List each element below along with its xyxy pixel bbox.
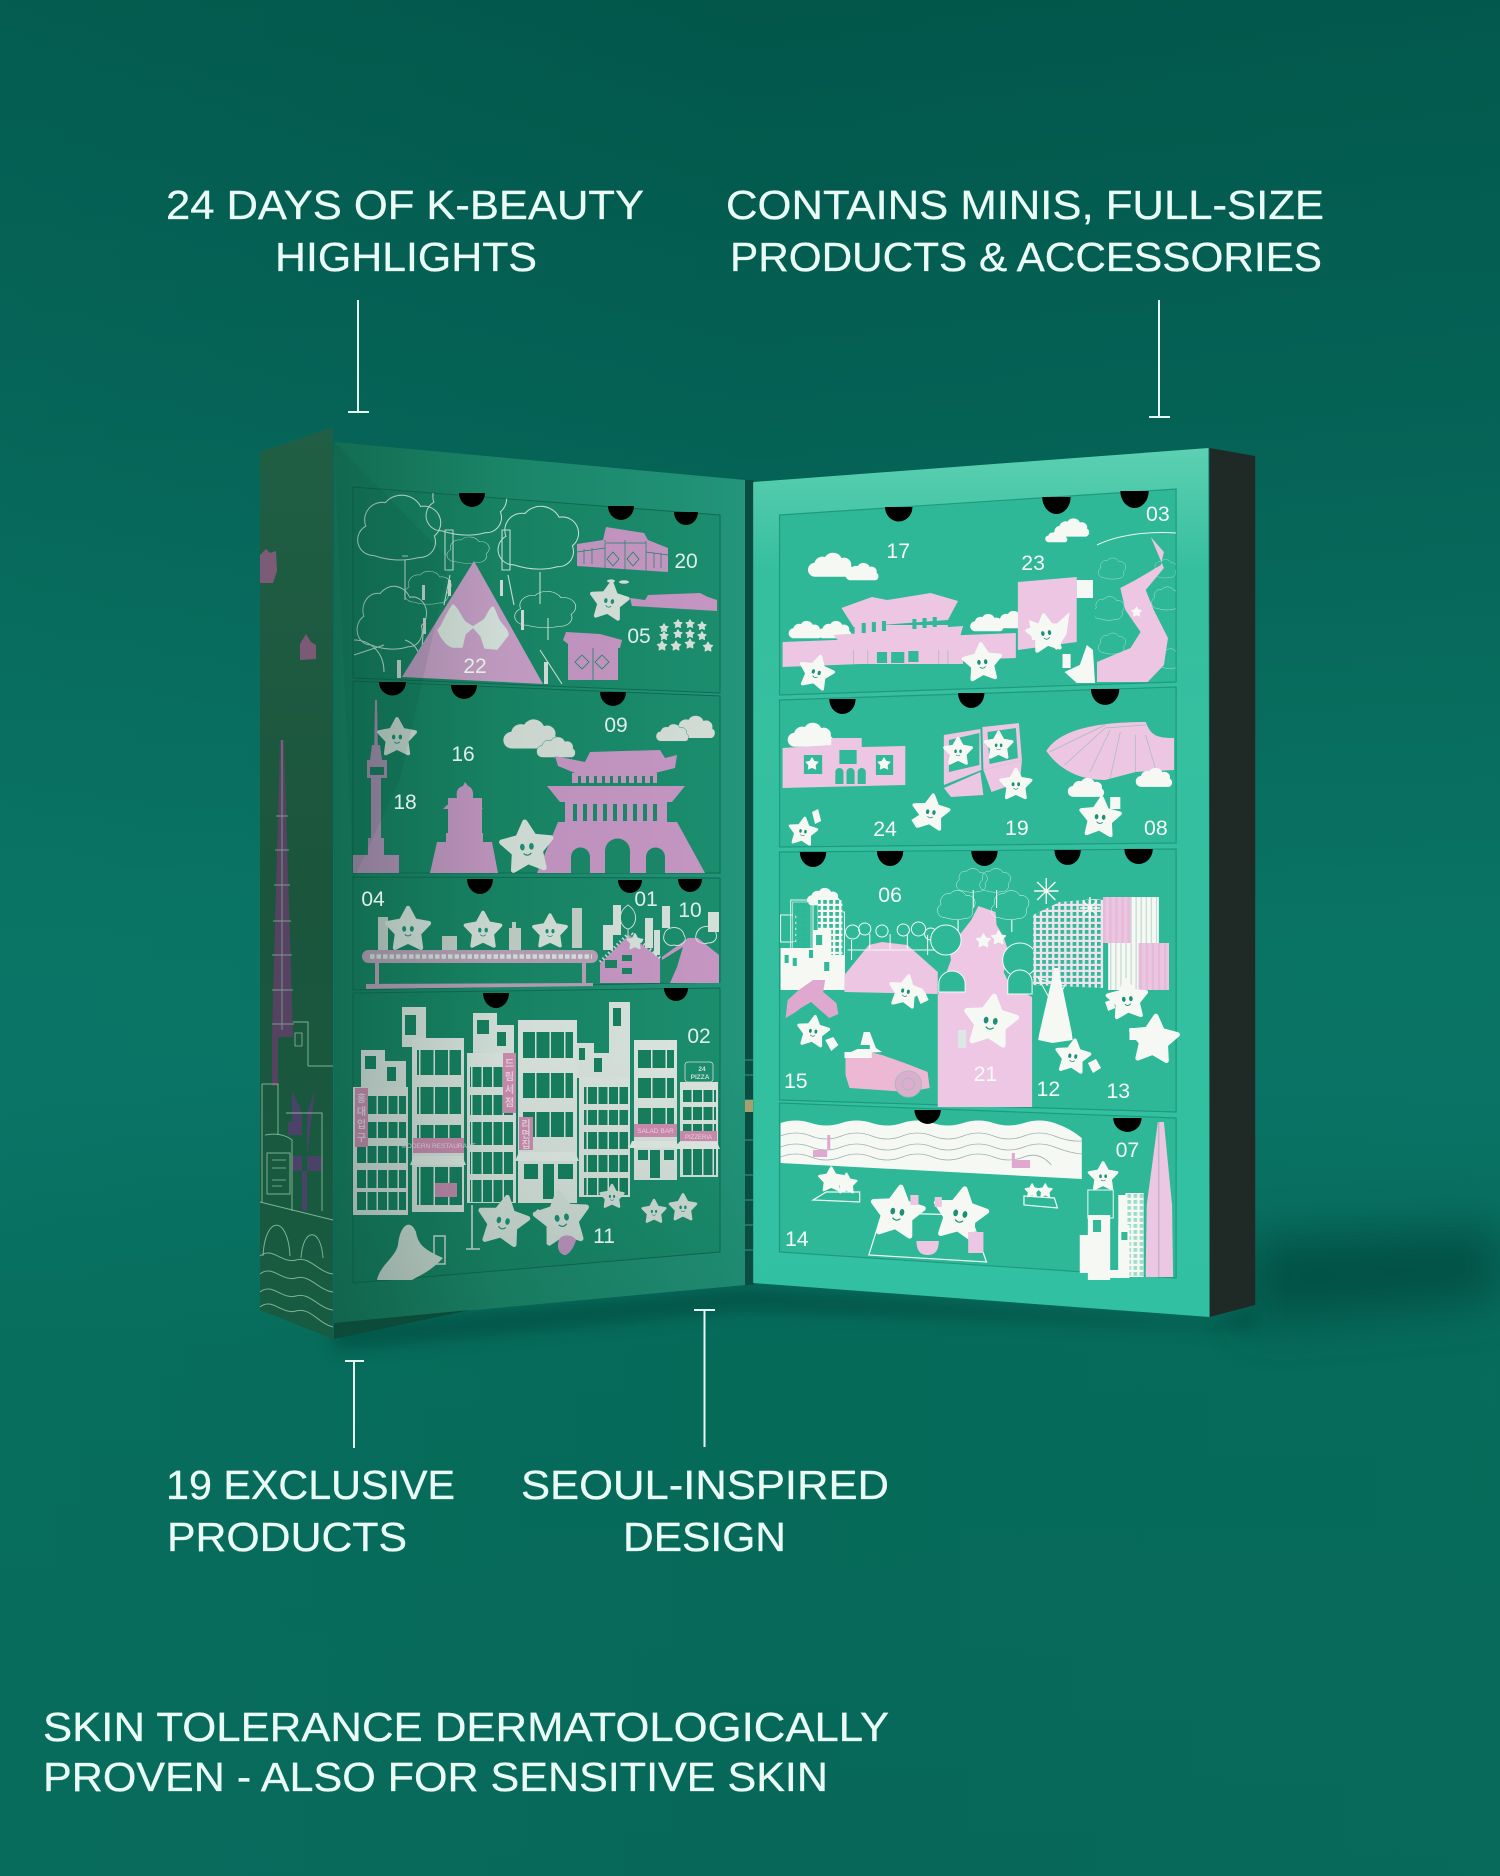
clouds (789, 518, 1089, 638)
heading: 24 days of k-beauty: HIGHLIGHTS (275, 234, 537, 280)
shop signs: SALAD BAR (637, 1128, 674, 1135)
heading: 19 exclusive products (166, 1462, 455, 1560)
heading: skin tolerance (43, 1704, 889, 1800)
right day numbers: 21 (974, 1063, 997, 1086)
stars (379, 719, 553, 871)
shop signs: 집 (521, 1139, 531, 1151)
stars and props (377, 1183, 696, 1280)
stars (788, 769, 1121, 845)
central spine (745, 480, 754, 1285)
heading: seoul-inspired design: DESIGN (623, 1514, 786, 1560)
heading: 24 days of k-beauty: 24 DAYS OF K-BEAUTY (166, 182, 644, 228)
left day numbers: 20 (674, 550, 698, 573)
pink board 23 (1018, 577, 1093, 650)
drawer row 4 illustration (353, 1002, 720, 1280)
right half of the box (753, 448, 1255, 1317)
right day numbers (784, 503, 1170, 1251)
heading: 24 days of k-beauty (166, 182, 644, 280)
drawer row 2 illustration (353, 700, 715, 873)
right day numbers: 14 (785, 1228, 809, 1251)
left day numbers: 22 (463, 655, 487, 678)
front buildings (353, 1020, 718, 1215)
left day numbers: 16 (451, 743, 475, 766)
flat palace (630, 593, 717, 611)
left day numbers: 04 (361, 888, 385, 911)
right day numbers: 17 (886, 540, 910, 563)
right row 3 illustration (781, 868, 1179, 1107)
trees outline (354, 472, 579, 684)
statue (430, 782, 498, 873)
right finger notches (800, 491, 1153, 1132)
namdaemun gate (537, 750, 705, 873)
striped blocks (1103, 897, 1169, 990)
river 03 (1097, 537, 1168, 682)
heading: 19 exclusive products: PRODUCTS (167, 1514, 407, 1560)
shop signs: 리 (521, 1119, 531, 1131)
left day numbers (361, 550, 711, 1248)
right drawers (780, 489, 1176, 1278)
left day numbers: 11 (593, 1225, 615, 1248)
left cover (334, 442, 745, 1323)
shop signs: PIZZERIA (685, 1135, 712, 1141)
shop signs: 림 (505, 1071, 514, 1083)
convertible car (844, 1032, 930, 1097)
floor shadow (334, 1228, 1500, 1350)
shop signs: 구 (357, 1132, 366, 1144)
left day numbers: 01 (634, 888, 658, 911)
trees 03 outline (1093, 532, 1183, 669)
food carts (944, 723, 1022, 797)
left drawers (353, 487, 720, 1283)
outline trees (937, 868, 1029, 932)
advent calendar box (260, 427, 1255, 1339)
scene 10 (662, 906, 719, 983)
shop signs: PIZZA (691, 1074, 710, 1081)
shop signs: 드 (505, 1058, 514, 1070)
shop signs: 입 (357, 1118, 366, 1131)
left day numbers: 09 (604, 714, 628, 737)
shop signs: 24 (698, 1066, 706, 1073)
awnings (410, 1141, 720, 1165)
stars (796, 931, 1179, 1073)
heading: contains minis: CONTAINS MINIS, FULL-SIZE (726, 182, 1324, 228)
star characters (589, 579, 713, 651)
picnic mats (813, 1192, 1057, 1262)
right row 1 illustration (783, 518, 1183, 690)
heading: contains minis (726, 182, 1324, 280)
heading: seoul-inspired design (521, 1462, 889, 1560)
heading: seoul-inspired design: SEOUL-INSPIRED (521, 1462, 889, 1508)
left day numbers: 10 (678, 899, 702, 922)
shop signs: 대 (357, 1105, 366, 1118)
shop signs: MODERN RESTAURANT (401, 1143, 476, 1150)
heading: skin tolerance: SKIN TOLERANCE DERMATOLOGICALLY (43, 1704, 889, 1750)
shop signs: 홍 (357, 1092, 366, 1105)
stars (797, 607, 1141, 690)
museum (783, 723, 905, 788)
left day numbers: 02 (687, 1025, 711, 1048)
gate building (577, 527, 668, 572)
shop signs: 면 (521, 1129, 531, 1141)
shop signs (355, 1053, 717, 1153)
shop signs: 점 (505, 1097, 514, 1109)
right cover (753, 448, 1210, 1317)
products (378, 908, 582, 950)
right day numbers: 08 (1144, 817, 1168, 840)
windows (357, 1032, 716, 1210)
palace (783, 593, 1016, 667)
drawer row 1 illustration (354, 472, 717, 684)
hotel (1033, 899, 1103, 1000)
pink hill and trees (844, 922, 939, 994)
pink mountain (402, 561, 543, 684)
right day numbers: 03 (1146, 503, 1170, 526)
callout line: bottom centre (694, 1310, 715, 1447)
callout line: top right (1149, 300, 1170, 417)
right day numbers: 19 (1005, 817, 1029, 840)
small gate (563, 632, 622, 680)
skyline 07 (1080, 1122, 1173, 1280)
white wing stars (438, 605, 508, 649)
stars and props (819, 1168, 1052, 1240)
pink tower (938, 906, 1032, 1107)
right day numbers: 06 (878, 884, 902, 907)
rear buildings (361, 1002, 630, 1087)
right row 4 illustration (781, 1120, 1173, 1280)
left cover base shadow (334, 1310, 470, 1339)
heading: skin tolerance: PROVEN - ALSO FOR SENSITIVE SKIN (43, 1754, 828, 1800)
left finger notches (379, 493, 702, 1008)
heading: contains minis: PRODUCTS & ACCESSORIES (730, 234, 1322, 280)
drawer row 3 illustration (362, 905, 719, 989)
river band (781, 1120, 1082, 1179)
sparkles (1034, 878, 1100, 919)
shop signs: 서 (505, 1083, 514, 1096)
city skyline 15 (781, 888, 844, 990)
arm (786, 980, 838, 1018)
right day numbers: 23 (1021, 552, 1045, 575)
callout line: bottom left (345, 1361, 364, 1448)
left cover shading (334, 442, 745, 1323)
oyster dome (1046, 722, 1174, 797)
right day numbers: 15 (784, 1070, 808, 1093)
scene 01 (600, 905, 660, 983)
conveyor belt (362, 950, 598, 989)
right dark side (1210, 448, 1255, 1317)
stars (387, 908, 566, 948)
heading: 19 exclusive products: 19 EXCLUSIVE (166, 1462, 455, 1508)
right day numbers: 13 (1106, 1080, 1130, 1103)
callout line: top left (348, 300, 369, 412)
right day numbers: 24 (873, 818, 897, 841)
right day numbers: 07 (1116, 1139, 1139, 1162)
cone (1038, 968, 1073, 1043)
left day numbers: 18 (393, 791, 417, 814)
right day numbers: 12 (1036, 1078, 1060, 1101)
left side panel (260, 427, 333, 1339)
seoul tower (353, 700, 399, 873)
right row 2 illustration (783, 722, 1174, 845)
clouds (503, 716, 715, 758)
left day numbers: 05 (627, 625, 651, 648)
